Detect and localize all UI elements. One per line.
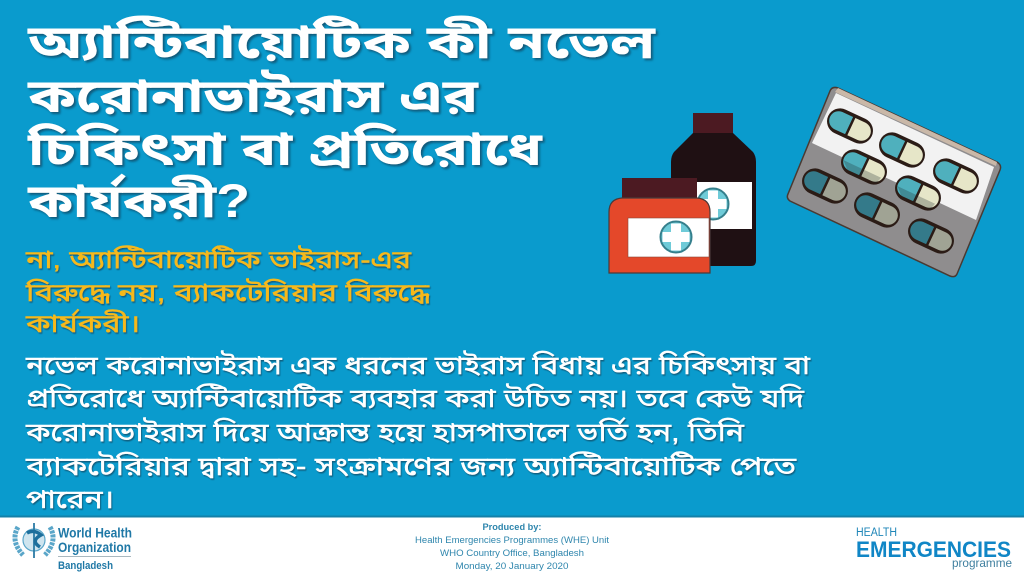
logo: World Health Organization Bangladesh [15,523,132,572]
footer credits: WHO Country Office, Bangladesh [440,548,584,558]
body text: প্রতিরোধে অ্যান্টিবায়োটিক ব্যবহার করা উচিত নয়। তবে কেউ যদি [26,383,805,413]
logo: Health Emergencies programme: HEALTH [856,527,897,539]
logo: World Health Organization Bangladesh: World Health [58,524,132,540]
yellow answer text: কার্যকরী। [25,308,140,338]
icon: WHO emblem [15,523,53,558]
body text: করোনাভাইরাস দিয়ে আক্রান্ত হয়ে হাসপাতালে ভর্তি হন, তিনি [25,417,744,447]
logo: World Health Organization Bangladesh: Organization [58,539,131,555]
footer credits: Health Emergencies Programmes (WHE) Unit [415,535,610,545]
icon: orange jar [609,178,710,273]
title: চিকিৎসা বা প্রতিরোধে [27,121,543,175]
icon: dark bottle [671,113,756,266]
yellow answer text: বিরুদ্ধে নয়, ব্যাকটেরিয়ার বিরুদ্ধে [25,278,430,307]
body text: ব্যাকটেরিয়ার দ্বারা সহ- সংক্রামণের জন্য অ্যান্টিবায়োটিক পেতে [25,451,797,481]
yellow answer text [25,245,430,338]
footer credits [415,522,610,571]
footer panel [0,516,1024,576]
body text [25,350,811,514]
icon: medicine bottles [609,113,756,273]
logo: Health Emergencies programme [856,527,1012,570]
title: কার্যকরী? [27,173,250,227]
title [27,15,657,227]
logo: Health Emergencies programme: EMERGENCIES [856,537,1011,562]
yellow answer text: না, অ্যান্টিবায়োটিক ভাইরাস-এর [25,245,412,274]
icon: blister pack of pills [787,87,1001,277]
title: অ্যান্টিবায়োটিক কী নভেল [27,15,657,68]
logo: World Health Organization Bangladesh: Bangladesh [58,560,113,572]
body text: পারেন। [26,484,114,514]
footer credits: Produced by: [482,522,542,532]
title: করোনাভাইরাস এর [27,69,479,122]
footer credits: Monday, 20 January 2020 [456,561,568,571]
logo: Health Emergencies programme: programme [952,556,1012,570]
body text: নভেল করোনাভাইরাস এক ধরনের ভাইরাস বিধায় এর চিকিৎসায় বা [25,350,811,380]
